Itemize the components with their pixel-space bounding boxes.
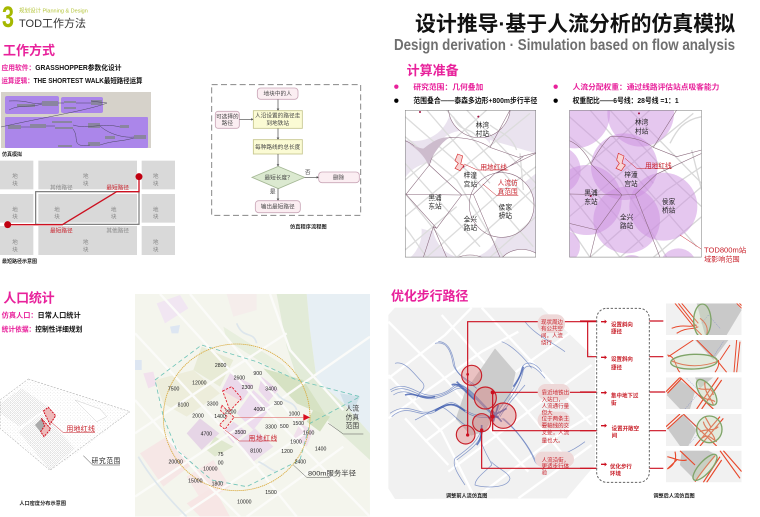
flowchart: simulation program: 输出最短路径 xyxy=(261,203,295,211)
caption: 仿真模拟 xyxy=(2,151,22,158)
shortest route diagram: 地 xyxy=(153,172,159,180)
map: weighted influence: 东站 xyxy=(584,197,598,206)
heading: optimized walking route: 优化步行路径 xyxy=(391,289,468,304)
section title: TOD工作方法 xyxy=(19,16,86,30)
flowchart: simulation program: 地块中的人 xyxy=(264,90,292,98)
population map: 12000 xyxy=(192,381,207,387)
label: TOD 800m influence: TOD800m站 xyxy=(704,246,746,255)
map: voronoi and 800m overlay: 桥站 xyxy=(499,211,512,220)
shortest route diagram: 地 xyxy=(12,238,18,246)
callout pills: 但大 xyxy=(542,409,553,417)
flowchart: simulation program: 否 xyxy=(305,169,311,176)
population map: 1900 xyxy=(290,439,302,445)
shortest route diagram: 地 xyxy=(83,172,89,180)
caption: 调整后人流仿真图 xyxy=(653,491,695,499)
map: voronoi and 800m overlay: 东站 xyxy=(428,202,442,211)
result panel 1 xyxy=(666,303,742,337)
shortest route diagram: 块 xyxy=(83,245,89,253)
callout pills: 人流通行量 xyxy=(542,402,570,410)
map: voronoi and 800m overlay: 用地红线 xyxy=(480,162,507,171)
strategy labels: 设置开敞空 xyxy=(612,424,640,432)
software line: 应用软件：GRASSHOPPER参数化设计 xyxy=(2,63,122,72)
map: weighted influence: 桥站 xyxy=(662,206,676,215)
map: voronoi and 800m overlay: 林湾 xyxy=(476,120,489,129)
population map: 7500 xyxy=(168,386,180,392)
population source line: 仿真人口：日常人口统计 xyxy=(2,311,81,320)
heading: calculation preparation: 计算准备 xyxy=(407,63,459,78)
strategy labels: 间 xyxy=(612,432,618,440)
flowchart: simulation program: 最短长度？ xyxy=(265,173,293,181)
callout pills: 绕行 xyxy=(541,339,552,347)
flowchart: simulation program: 人沿设置的路径走 xyxy=(255,112,301,120)
population map: 3300 xyxy=(265,424,277,430)
map: weighted influence: 梓潼 xyxy=(624,170,638,179)
callout pills: 有公共空 xyxy=(541,325,563,333)
strategy labels xyxy=(601,320,640,478)
heading: working method: 工作方式 xyxy=(3,43,55,58)
population map: 2000 xyxy=(192,414,204,420)
flowchart: simulation program xyxy=(212,85,361,231)
map: voronoi and 800m overlay: 真范围 xyxy=(498,187,518,196)
bullet: scope overlay: 范围叠合——泰森多边形+800m步行半径 xyxy=(413,96,538,105)
shortest route diagram: 块 xyxy=(153,179,159,187)
population map: 1500 xyxy=(265,490,277,496)
map: weighted influence: 侯家 xyxy=(662,197,676,206)
population map: 1600 xyxy=(303,431,315,437)
population map: 4000 xyxy=(254,407,265,413)
shortest route diagram: 地 xyxy=(111,205,117,213)
strategy labels: 捷径 xyxy=(611,328,622,336)
flowchart: simulation program: 仿真程序流程图 xyxy=(290,223,327,231)
shortest route diagram: 块 xyxy=(54,213,60,221)
population map: 75 xyxy=(218,452,224,458)
population map: 1500 xyxy=(293,421,304,427)
panel: working method xyxy=(0,43,175,265)
shortest route diagram: 其他路径 xyxy=(50,184,73,192)
population map: 1000 xyxy=(289,412,300,418)
map: voronoi and 800m overlay: 宫站 xyxy=(464,180,477,189)
result panel 5 xyxy=(666,451,742,484)
population map: 4700 xyxy=(201,431,212,437)
shortest route diagram: 块 xyxy=(153,213,159,221)
population map: 1200 xyxy=(281,449,293,455)
result panel 2 xyxy=(666,340,742,372)
population map: 800m服务半径 xyxy=(308,469,356,478)
callout pills: 位于两条主 xyxy=(542,414,570,422)
map: voronoi and 800m overlay: 路站 xyxy=(464,223,477,232)
isometric density map: 用地红线 xyxy=(66,424,95,433)
population map: 1400 xyxy=(214,414,226,420)
isometric density map xyxy=(0,379,130,470)
flowchart: simulation program: 到地铁站 xyxy=(266,119,289,127)
caption: 最短路径示意图 xyxy=(2,258,37,265)
population map: 人流 xyxy=(346,404,359,413)
logic line: 运算逻辑：THE SHORTEST WALK最短路径运算 xyxy=(2,76,142,85)
flowchart: simulation program: 是 xyxy=(270,189,276,196)
label: TOD 800m influence: 域影响范围 xyxy=(704,254,740,263)
panel: optimized walking route xyxy=(388,289,598,500)
population map xyxy=(135,294,370,517)
map: voronoi and 800m overlay xyxy=(405,110,536,258)
map: weighted influence: 全兴 xyxy=(620,212,634,221)
map: voronoi and 800m overlay: 人流仿 xyxy=(498,178,518,187)
population map: 2200 xyxy=(225,409,237,415)
shortest route diagram: 地 xyxy=(153,205,159,213)
map: voronoi and 800m overlay: 黑浦 xyxy=(428,193,442,202)
shortest route diagram: 块 xyxy=(83,179,89,187)
population map: 2600 xyxy=(234,375,245,381)
map: voronoi and 800m overlay: 梓潼 xyxy=(464,170,477,179)
callout pills: 更适步行体 xyxy=(542,462,570,470)
population map: 300 xyxy=(274,401,283,407)
bullet: flow weights: 人流分配权重：通过线路评估站点吸客能力 xyxy=(573,82,719,91)
shortest route diagram: 地 xyxy=(12,205,18,213)
population map: 900 xyxy=(253,371,262,377)
grasshopper node graph xyxy=(1,92,151,148)
section kicker: 规划设计 Planning & Design xyxy=(19,6,88,14)
map: voronoi and 800m overlay: 村站 xyxy=(476,129,489,138)
strategy labels: 优化步行 xyxy=(610,462,632,470)
population map: 用地红线 xyxy=(249,433,278,442)
flowchart: simulation program: 路径 xyxy=(222,119,233,127)
panel: strategies and adjusted flows xyxy=(580,303,742,499)
shortest route diagram: 块 xyxy=(12,179,18,187)
strategy labels: 设置斜向 xyxy=(611,355,633,363)
population map: 3300 xyxy=(207,401,219,407)
shortest route diagram: 块 xyxy=(12,245,18,253)
population map: 15000 xyxy=(188,479,203,485)
label: TOD 800m influence xyxy=(704,246,746,263)
map: weighted influence: 宫站 xyxy=(624,179,638,188)
bullet: weight ratio: 权重配比——6号线：28号线 =1：1 xyxy=(573,96,679,105)
callout pills: 间，人流 xyxy=(541,332,563,340)
callout pills: 现状周边 xyxy=(541,318,563,326)
shortest route diagram: 地 xyxy=(12,172,18,180)
isometric density map: 研究范围 xyxy=(92,456,121,465)
shortest route diagram: 块 xyxy=(153,245,159,253)
callout pills: 要轴线的交 xyxy=(542,421,570,429)
flowchart: simulation program: 每种路线的总长度 xyxy=(255,143,301,151)
callout pills: 靠近地铁出 xyxy=(542,389,569,397)
flowchart: simulation program: 可选择的 xyxy=(216,112,239,120)
bullet: research scope: 研究范围：几何叠加 xyxy=(413,82,483,91)
map: weighted influence: 路站 xyxy=(620,221,634,230)
population map: 20000 xyxy=(168,459,183,465)
callout pills: 人流沿街， xyxy=(542,456,569,464)
callout pills: 量也大。 xyxy=(542,436,564,444)
population map: 1400 xyxy=(315,446,327,452)
flow simulation map before adjustment xyxy=(388,308,598,499)
population map: 10000 xyxy=(203,467,218,473)
callout pills xyxy=(535,314,574,477)
population map: 2300 xyxy=(242,385,253,391)
population map: 3400 xyxy=(265,386,277,392)
strategy labels: 环境 xyxy=(610,470,621,478)
caption: 调整前人流仿真图 xyxy=(446,492,487,500)
strategy labels: 集中地下过 xyxy=(611,392,639,400)
callout pills: 验 xyxy=(542,469,548,477)
shortest route diagram: 地 xyxy=(153,238,159,246)
shortest route diagram: 块 xyxy=(111,213,117,221)
map: weighted influence: 林湾 xyxy=(635,118,649,127)
panel: calculation preparation xyxy=(352,63,746,315)
population map: 3500 xyxy=(235,430,246,436)
callout pills: 叉处，人流 xyxy=(542,428,570,436)
map: weighted influence: 黑浦 xyxy=(584,188,598,197)
main title: 设计推导·基于人流分析的仿真模拟 xyxy=(415,13,735,36)
shortest route diagram: 最短路径 xyxy=(106,184,129,192)
population map: 00 xyxy=(218,460,224,466)
population map: 500 xyxy=(280,424,289,430)
strategy labels: 街 xyxy=(611,399,617,407)
result panel 3 xyxy=(666,376,742,409)
callout pills: 入站口， xyxy=(542,396,564,404)
strategy dashed frame xyxy=(597,308,649,482)
panel: population statistics xyxy=(0,290,130,507)
heading: population statistics: 人口统计 xyxy=(3,290,55,305)
strategy labels: 设置斜向 xyxy=(611,320,633,328)
strategy labels: 捷径 xyxy=(611,363,622,371)
result panel 4 xyxy=(666,414,742,446)
map: weighted influence xyxy=(569,110,702,258)
shortest route diagram: 地 xyxy=(83,238,89,246)
population map: 10000 xyxy=(237,499,252,505)
population map: 1800 xyxy=(212,481,223,487)
population map: 8100 xyxy=(178,403,189,409)
connector lines xyxy=(580,321,666,468)
map: voronoi and 800m overlay: 全兴 xyxy=(464,214,477,223)
shortest route diagram: 最短路径 xyxy=(50,226,73,234)
section number badge: 3 xyxy=(2,1,14,34)
shortest route diagram: 块 xyxy=(12,213,18,221)
population map: 范围 xyxy=(346,421,359,430)
shortest route diagram xyxy=(0,161,175,255)
map: weighted influence: 用地红线 xyxy=(645,161,672,170)
map: weighted influence: 村站 xyxy=(635,126,649,135)
caption: 人口密度分布示意图 xyxy=(19,499,66,507)
population map: 仿真 xyxy=(346,412,359,421)
population map: 8100 xyxy=(250,448,262,454)
shortest route diagram: 地 xyxy=(54,205,60,213)
population map: 2800 xyxy=(215,363,227,369)
statistical basis line: 统计依据：控制性详细规划 xyxy=(2,324,82,333)
population map: 2400 xyxy=(295,459,306,465)
shortest route diagram: 其他路径 xyxy=(106,226,129,234)
flowchart: simulation program: 删除 xyxy=(333,173,345,181)
map: voronoi and 800m overlay: 侯家 xyxy=(499,202,512,211)
